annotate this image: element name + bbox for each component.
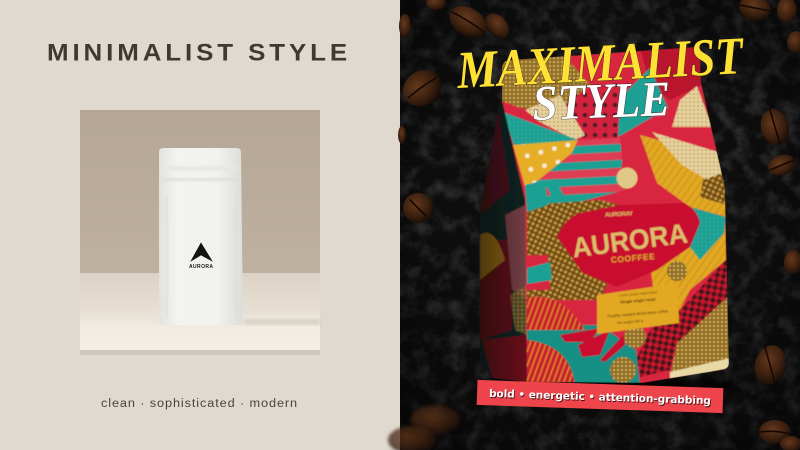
maximalist coffee bag <box>475 45 735 395</box>
white coffee bag <box>159 148 243 325</box>
yellow info label <box>597 283 679 334</box>
left gusset <box>478 100 528 385</box>
caption: minimalist descriptors: clean · sophisticated · modern <box>101 398 298 410</box>
banner: maximalist descriptors <box>477 380 723 413</box>
small brand line: AURORAY <box>605 211 633 219</box>
title: style: STYLE <box>531 70 671 131</box>
logo wordmark: AURORA <box>189 264 213 270</box>
bean creases <box>408 5 794 434</box>
brand name on bag: AURORA <box>570 218 689 264</box>
panel: minimalist background <box>0 0 400 450</box>
front panel artwork <box>500 45 732 385</box>
logo mark <box>191 243 212 261</box>
gold circles <box>616 168 638 188</box>
minimalist product photo <box>80 110 320 355</box>
banner: maximalist descriptors: bold • energetic • attention-grabbing <box>489 388 711 407</box>
yellow info label: Lorem ipsum roast blend <box>619 290 657 298</box>
panel: maximalist dark background <box>400 0 800 450</box>
title: minimalist style: MINIMALIST STYLE <box>47 40 351 66</box>
coffee beans scattered <box>388 0 800 450</box>
banner: maximalist descriptors: bold • energetic • attention-grabbing <box>490 389 712 408</box>
title: maximalist: MAXIMALIST <box>455 27 746 100</box>
red medallion <box>557 203 700 287</box>
bottom teal and red shapes <box>527 325 640 385</box>
yellow info label: Single origin roast <box>620 296 656 305</box>
yellow info label: Freshly roasted whole bean coffee <box>607 308 669 319</box>
product name on bag: COOFFEE <box>610 251 655 265</box>
yellow info label: Net weight 250 g <box>617 319 643 325</box>
